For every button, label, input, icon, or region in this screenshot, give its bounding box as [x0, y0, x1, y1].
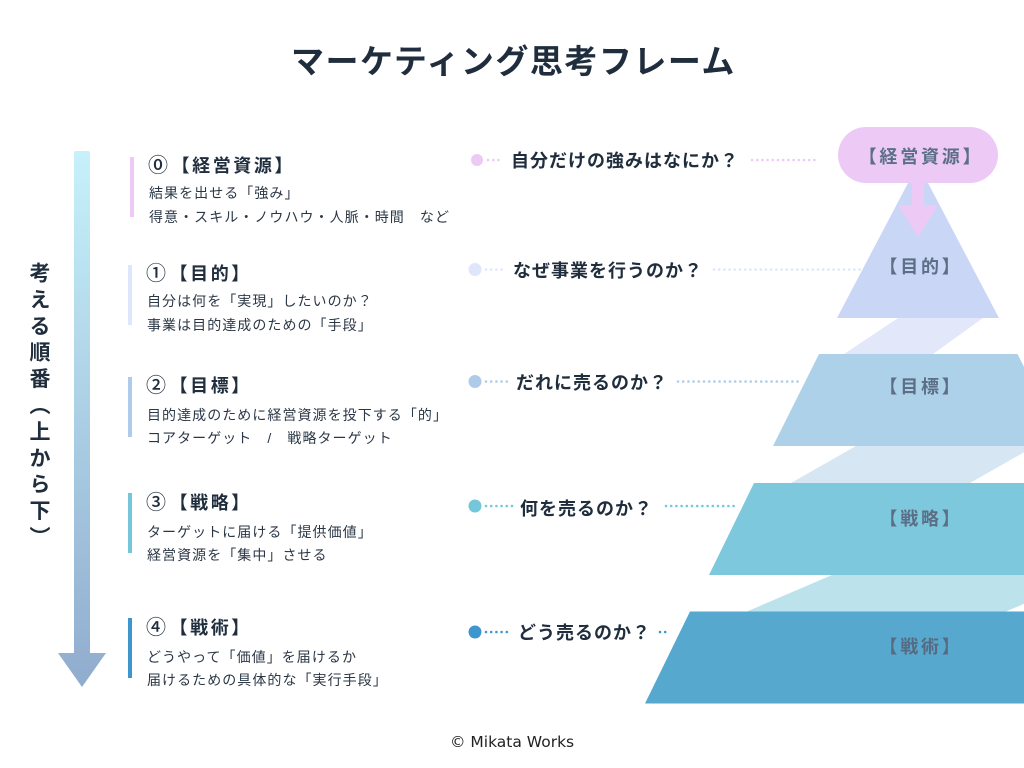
- pyramid label: purpose: 【目的】: [879, 257, 963, 277]
- pyramid: target tier: [773, 354, 1024, 446]
- heading: ③: [146, 492, 166, 514]
- question 3: 何を売るのか？: [520, 499, 653, 519]
- heading: [146, 262, 252, 285]
- heading: 【目的】: [170, 264, 252, 284]
- item 2: target: [128, 374, 448, 446]
- heading: ①: [146, 263, 166, 285]
- pyramid label: strategy: 【戦略】: [879, 509, 963, 529]
- question 2: だれに売るのか？: [516, 373, 668, 393]
- body text: 得意・スキル・ノウハウ・人脈・時間 など: [149, 209, 450, 225]
- pyramid: tactics tier: [645, 612, 1024, 704]
- pyramid label: resources: 【経営資源】: [859, 147, 983, 167]
- item 0: resources: [130, 154, 450, 225]
- pyramid: purpose tier: [837, 164, 999, 318]
- body text: [147, 524, 373, 563]
- accent bar: [130, 157, 134, 217]
- heading: 【戦術】: [170, 618, 252, 638]
- dotted connector: row 3: [468, 500, 734, 512]
- body text: ターゲットに届ける「提供価値」: [147, 524, 373, 540]
- accent bar: [128, 377, 132, 437]
- heading: 【経営資源】: [172, 156, 295, 176]
- body text: どうやって「価値」を届けるか: [147, 648, 357, 664]
- heading: ②: [146, 375, 166, 397]
- body text: コアターゲット / 戦略ターゲット: [147, 430, 393, 446]
- heading: 【戦略】: [170, 493, 252, 513]
- body text: 事業は目的達成のための「手段」: [147, 317, 373, 333]
- accent bar: [128, 265, 132, 325]
- heading: [146, 374, 252, 397]
- footer credit: © Mikata Works: [450, 733, 574, 751]
- heading: 【目標】: [170, 376, 252, 396]
- question 1: なぜ事業を行うのか？: [513, 261, 703, 281]
- dotted connector: row 0: [471, 154, 816, 166]
- pyramid: strategy tier: [709, 483, 1024, 575]
- body text: [149, 185, 450, 225]
- body text: 結果を出せる「強み」: [149, 185, 300, 201]
- dotted connector: row 2: [468, 375, 801, 388]
- item 3: strategy: [128, 492, 373, 563]
- body text: 目的達成のために経営資源を投下する「的」: [147, 406, 448, 422]
- item 1: purpose: [128, 262, 373, 333]
- pyramid label: target: 【目標】: [879, 377, 963, 397]
- question 0: 自分だけの強みはなにか？: [511, 151, 739, 171]
- accent bar: [128, 618, 132, 678]
- title: マーケティング思考フレーム: [291, 43, 736, 80]
- body text: [147, 406, 448, 446]
- dotted connector: row 4: [468, 626, 668, 638]
- heading: [146, 492, 252, 514]
- body text: [147, 648, 388, 688]
- body text: 届けるための具体的な「実行手段」: [147, 672, 388, 688]
- accent bar: [128, 493, 132, 553]
- item 4: tactics: [128, 616, 388, 688]
- body text: 自分は何を「実現」したいのか？: [147, 293, 373, 309]
- body text: 経営資源を「集中」させる: [147, 547, 328, 563]
- icon: resources pill and down arrow: [838, 127, 998, 237]
- question 4: どう売るのか？: [518, 623, 651, 643]
- pyramid label: tactics: 【戦術】: [879, 637, 963, 657]
- heading: ⓪: [148, 155, 168, 177]
- heading: [146, 616, 252, 639]
- vertical label: thinking order: 考える順番（上から下）: [27, 262, 50, 552]
- body text: [147, 293, 373, 333]
- pyramid: connector bands: [747, 318, 1024, 612]
- heading: ④: [146, 617, 166, 639]
- icon: order arrow: [58, 151, 106, 687]
- dotted connector: row 1: [468, 263, 860, 276]
